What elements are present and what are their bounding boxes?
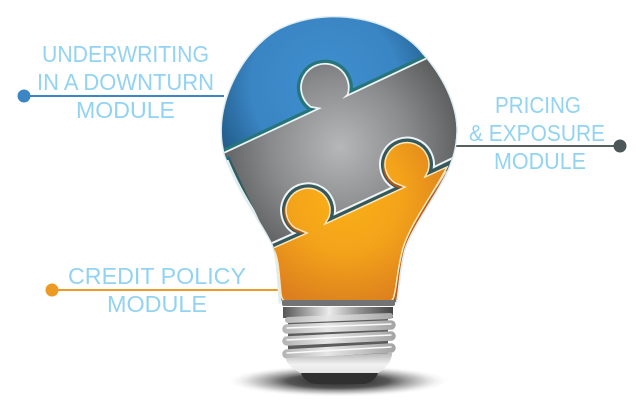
puzzle pieces	[222, 17, 456, 302]
text: pricing heading: MODULE	[494, 148, 586, 174]
lower cone	[286, 353, 392, 374]
puzzle piece: orange	[271, 143, 447, 302]
text: underwriting heading: IN A DOWNTURN	[37, 69, 214, 95]
ground shadow	[225, 365, 451, 397]
right edge shadow	[394, 166, 449, 302]
knob shadows	[284, 156, 403, 234]
illustration: light bulb	[220, 16, 458, 396]
text: pricing heading	[469, 92, 605, 174]
puzzle piece: grey	[224, 59, 456, 252]
text: credit policy heading: CREDIT POLICY	[68, 263, 246, 289]
metal band	[283, 307, 393, 318]
collar	[282, 300, 395, 306]
contact tip	[301, 373, 378, 384]
text: underwriting heading: MODULE	[76, 97, 175, 123]
seam: dark and white edge of orange piece	[262, 143, 460, 253]
text: credit policy heading	[68, 263, 246, 317]
text: underwriting heading	[37, 41, 214, 123]
connector: dark line and dot	[455, 140, 626, 152]
label: credit policy module	[46, 263, 281, 317]
text: credit policy heading: MODULE	[107, 291, 207, 317]
text: pricing heading: PRICING	[495, 92, 581, 118]
label: underwriting in a downturn module	[18, 41, 224, 123]
label: pricing and exposure module	[455, 92, 626, 174]
text: pricing heading: & EXPOSURE	[469, 120, 605, 146]
threads	[287, 316, 391, 354]
text: underwriting heading: UNDERWRITING	[42, 41, 209, 67]
connector: blue line and dot	[18, 90, 224, 102]
seam: teal and white edge of grey piece	[215, 53, 440, 158]
puzzle piece: blue	[222, 17, 456, 160]
thread body	[288, 317, 388, 359]
connector: orange line and dot	[46, 284, 281, 296]
bulb outline	[222, 17, 456, 302]
screw base	[282, 300, 395, 384]
